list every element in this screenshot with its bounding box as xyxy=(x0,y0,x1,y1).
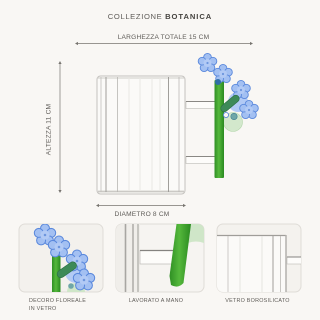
caption: floral detail: IN VETRO xyxy=(29,306,56,312)
mug body xyxy=(97,76,185,194)
caption: borosilicate glass: VETRO BOROSILICATO xyxy=(225,298,290,304)
green leaf xyxy=(224,112,242,132)
green stem xyxy=(214,80,224,178)
caption: floral detail: DECORO FLOREALE xyxy=(29,298,86,304)
arrow: height xyxy=(58,61,62,193)
arrow: total width xyxy=(75,42,253,45)
green bud xyxy=(219,94,241,113)
panel: handmade detail xyxy=(116,224,204,292)
panel: borosilicate glass detail xyxy=(217,224,303,295)
blue flowers xyxy=(198,53,258,120)
label: height: ALTEZZA 11 CM xyxy=(46,104,52,155)
label: diameter: DIAMETRO 8 CM xyxy=(114,211,170,218)
title: COLLEZIONE BOTANICA xyxy=(108,12,212,21)
handle bars xyxy=(186,102,215,164)
label: total width: LARGHEZZA TOTALE 15 CM xyxy=(118,34,209,41)
panel: floral detail xyxy=(19,224,103,301)
caption: handmade detail: LAVORATO A MANO xyxy=(129,298,183,304)
mug illustration xyxy=(97,53,258,194)
arrow: diameter xyxy=(96,204,186,207)
